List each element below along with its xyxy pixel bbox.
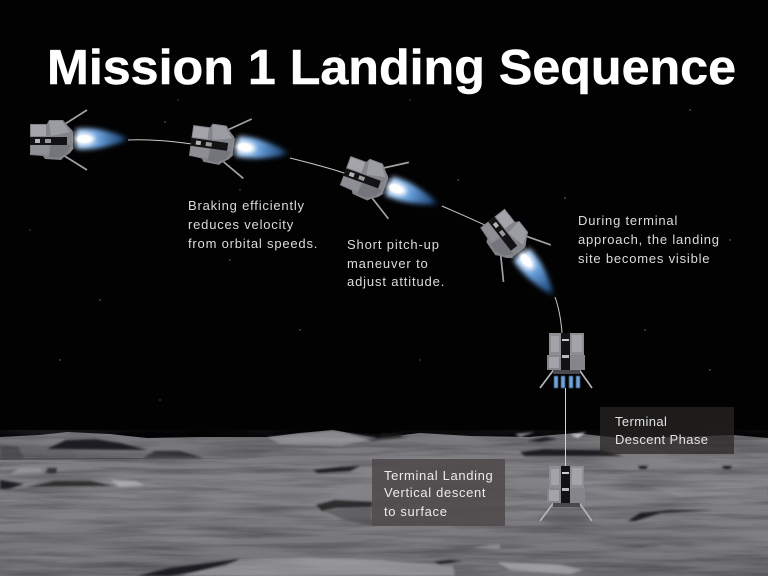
lander 3 with engine plume: [335, 143, 450, 234]
callout: terminal descent phase: Descent Phase: [615, 432, 708, 447]
lunar surface: [0, 430, 768, 576]
callout: terminal landing: to surface: [384, 504, 448, 519]
lander 2 with engine plume: [187, 111, 295, 185]
lander 1 with engine plume: [30, 110, 131, 170]
caption: pitch-up: adjust attitude.: [347, 274, 445, 289]
title: Mission 1 Landing Sequence: [47, 41, 736, 95]
caption: braking: from orbital speeds.: [188, 236, 318, 251]
callout: terminal landing: Vertical descent: [384, 485, 486, 500]
caption: braking: Braking efficiently: [188, 198, 305, 213]
caption: terminal approach: site becomes visible: [578, 251, 710, 266]
vertical descent line: [564, 388, 566, 467]
caption: terminal approach: During terminal: [578, 213, 678, 228]
caption: pitch-up: maneuver to: [347, 256, 429, 271]
callout: terminal descent phase: Terminal: [615, 414, 667, 429]
lander 5 in terminal descent: [540, 333, 592, 388]
trajectory line: [128, 140, 562, 333]
caption: terminal approach: approach, the landing: [578, 232, 720, 247]
callout: terminal landing: [372, 459, 505, 526]
caption: braking: reduces velocity: [188, 217, 294, 232]
lander 4 with engine plume: [468, 200, 578, 317]
callout: terminal landing: Terminal Landing: [384, 468, 493, 483]
callout: terminal descent phase: [600, 407, 734, 454]
lander 6 on surface: [540, 466, 592, 523]
dark crater shadows: [0, 432, 732, 576]
caption: pitch-up: Short pitch-up: [347, 237, 440, 252]
bright ridges: [0, 431, 768, 576]
